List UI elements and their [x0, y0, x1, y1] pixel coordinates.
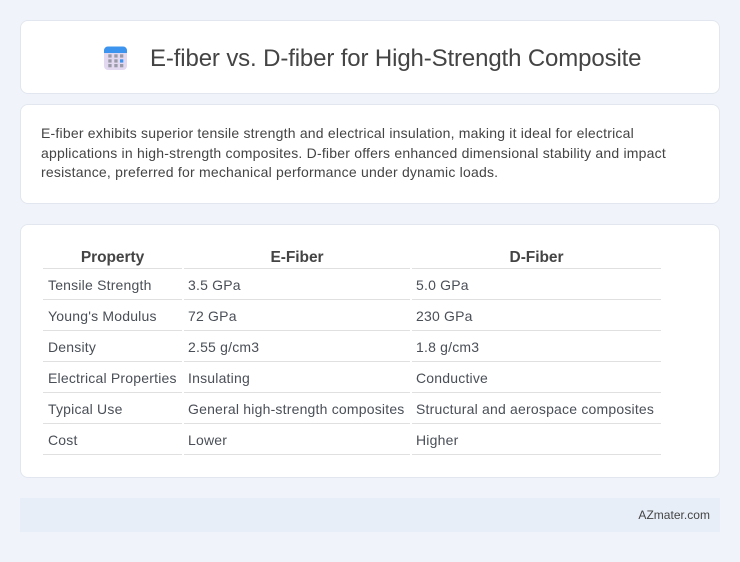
row: young's modulus: 72 GPa: [188, 308, 237, 324]
title: E-fiber vs. D-fiber for High-Strength Composite: [150, 45, 641, 72]
text: summary paragraph: E-fiber exhibits superior tensile strength and electrical insulation, making it ideal for electrical: [41, 125, 634, 141]
row: density: 1.8 g/cm3: [416, 339, 479, 355]
row: electrical properties: Conductive: [416, 370, 488, 386]
panel: comparison table: [20, 224, 720, 478]
footer text: source: AZmater.com: [638, 508, 710, 522]
text: summary paragraph: resistance, preferred for mechanical performance under dynamic loads.: [41, 164, 498, 180]
row: density: [43, 339, 661, 362]
row: tensile strength: [43, 277, 661, 300]
table header: E-Fiber: [270, 249, 324, 266]
row: density: 2.55 g/cm3: [188, 339, 259, 355]
table header: D-Fiber: [510, 249, 563, 266]
icon: calendar: [104, 46, 127, 70]
row: electrical properties: Insulating: [188, 370, 250, 386]
row: young's modulus: 230 GPa: [416, 308, 473, 324]
table header: Property: [81, 249, 144, 266]
row: cost: [43, 432, 661, 455]
text: summary paragraph: applications in high-strength composites. D-fiber offers enhanced dimensional stability and impact: [41, 145, 666, 161]
table header: [43, 249, 661, 269]
panel: title card: [20, 20, 720, 94]
row: cost: Higher: [416, 432, 458, 448]
row: typical use: [43, 401, 661, 424]
row: typical use: Structural and aerospace composites: [416, 401, 654, 417]
row: tensile strength: 3.5 GPa: [188, 277, 241, 293]
panel: summary: [20, 104, 720, 204]
row: young's modulus: Young's Modulus: [48, 308, 157, 324]
text: summary paragraph: [41, 125, 666, 180]
row: density: Density: [48, 339, 96, 355]
row: electrical properties: [43, 370, 661, 393]
footer bar: [20, 498, 720, 532]
row: young's modulus: [43, 308, 661, 331]
row: tensile strength: 5.0 GPa: [416, 277, 469, 293]
row: cost: Lower: [188, 432, 227, 448]
row: typical use: Typical Use: [48, 401, 123, 417]
row: cost: Cost: [48, 432, 78, 448]
row: electrical properties: Electrical Properties: [48, 370, 177, 386]
row: typical use: General high-strength composites: [188, 401, 405, 417]
row: tensile strength: Tensile Strength: [48, 277, 152, 293]
